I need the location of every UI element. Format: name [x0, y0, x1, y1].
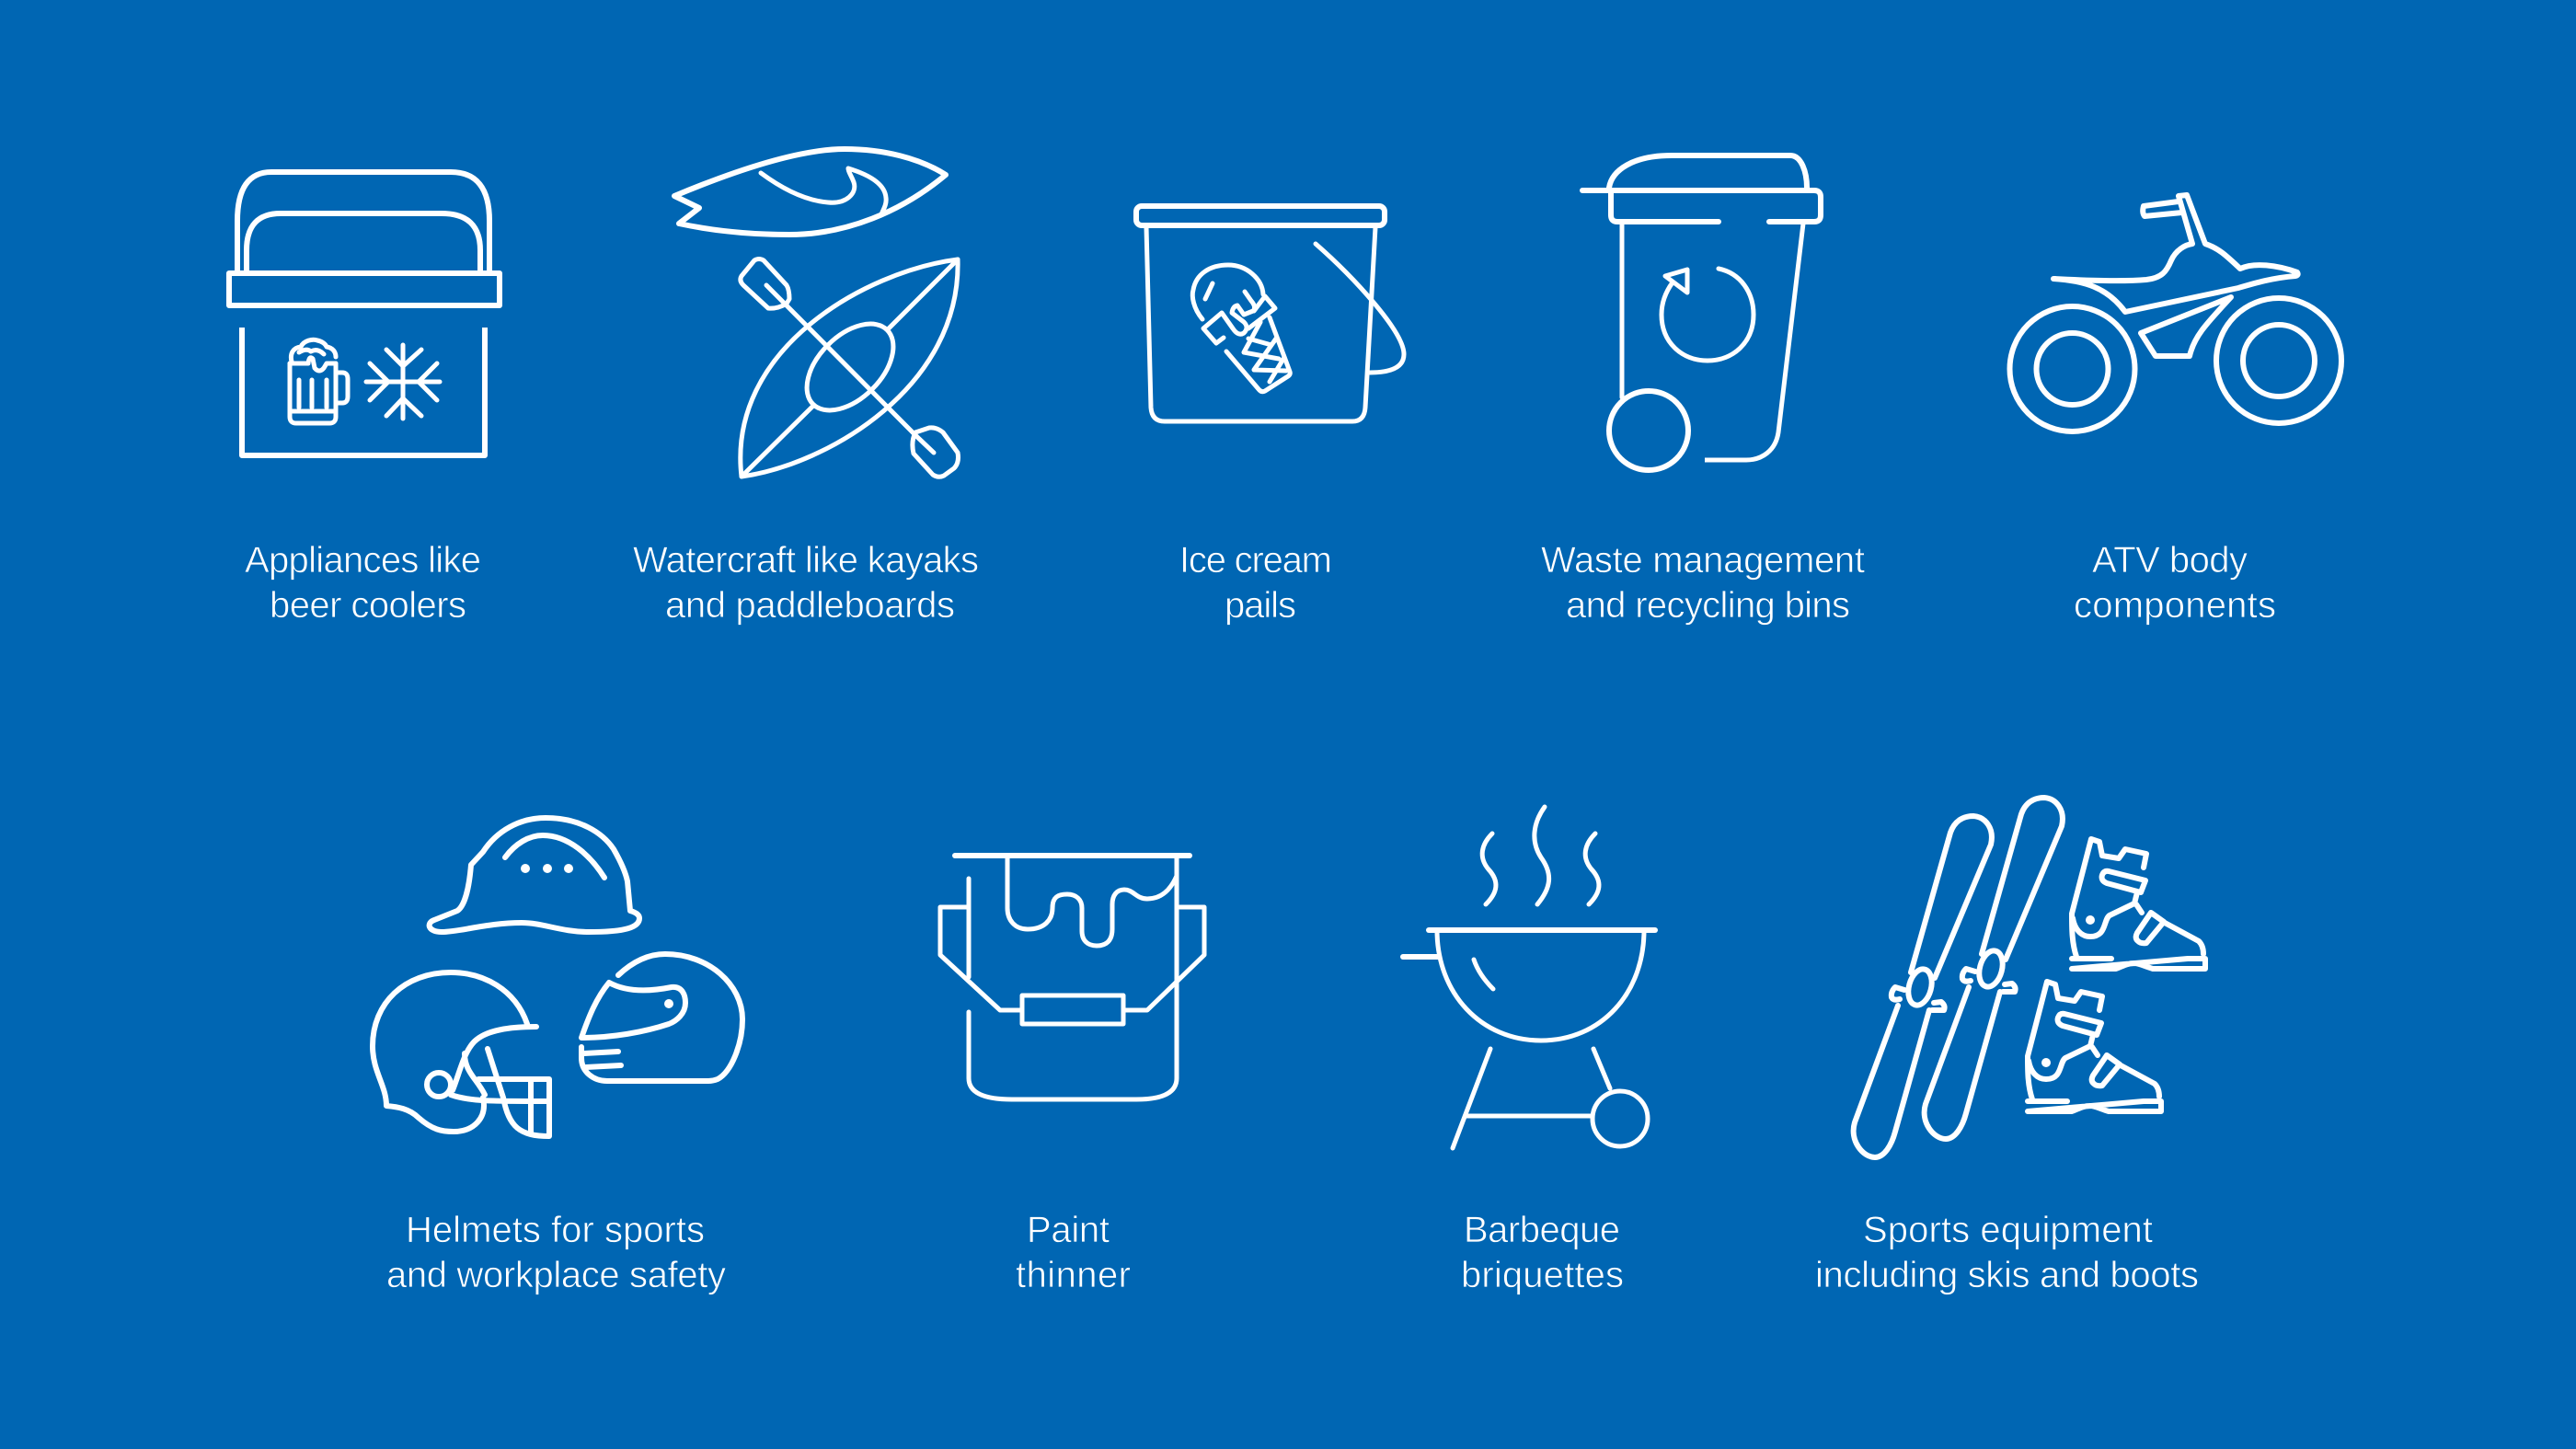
label: sports equipment: including skis and boots: [1815, 1255, 2199, 1295]
panel: appliances: [229, 172, 500, 626]
label: paint thinner: [1016, 1210, 1131, 1295]
panel: ATV: [2009, 195, 2341, 626]
label: ice cream pails: pails: [1225, 585, 1296, 626]
icon: pail with ice cream: [1136, 206, 1404, 421]
icon: paint can: [940, 856, 1204, 1099]
label: paint thinner: thinner: [1016, 1255, 1131, 1295]
label: barbeque: Barbeque: [1464, 1210, 1620, 1250]
panel: waste bins: [1541, 155, 1865, 626]
label: waste bins: [1541, 540, 1865, 626]
label: barbeque: [1461, 1210, 1624, 1295]
label: sports equipment: [1815, 1210, 2199, 1295]
label: watercraft: Watercraft like kayaks: [633, 540, 979, 581]
label: watercraft: [633, 540, 979, 626]
label: helmets: Helmets for sports: [406, 1210, 705, 1250]
panel: ice cream pails: [1136, 206, 1404, 626]
panel: barbeque: [1403, 807, 1655, 1295]
label: barbeque: briquettes: [1461, 1255, 1624, 1295]
label: paint thinner: Paint: [1027, 1210, 1110, 1250]
panel: sports equipment: [1815, 798, 2205, 1295]
icon: recycling bin: [1582, 155, 1821, 470]
label: appliances: beer coolers: [270, 585, 466, 626]
icon: helmets: [373, 818, 742, 1136]
label: sports equipment: Sports equipment: [1863, 1210, 2153, 1250]
label: ATV: ATV body: [2092, 540, 2248, 581]
label: helmets: and workplace safety: [386, 1255, 726, 1295]
label: waste bins: Waste management: [1541, 540, 1865, 581]
label: appliances: Appliances like: [245, 540, 481, 581]
label: helmets: [386, 1210, 726, 1295]
panel: helmets: [373, 818, 742, 1295]
icon: grill: [1403, 807, 1655, 1148]
icon: skis and boots: [1854, 798, 2205, 1157]
label: waste bins: and recycling bins: [1566, 585, 1850, 626]
panel: watercraft: [633, 149, 979, 626]
label: appliances: [245, 540, 481, 626]
label: watercraft: and paddleboards: [665, 585, 955, 626]
label: ice cream pails: [1179, 540, 1332, 626]
icon: cooler: [229, 172, 500, 455]
label: ATV: components: [2074, 585, 2276, 626]
icon: ATV: [2009, 195, 2341, 431]
label: ice cream pails: Ice cream: [1179, 540, 1332, 581]
label: ATV: [2074, 540, 2276, 626]
panel: paint thinner: [940, 856, 1204, 1295]
icon: surfboard and kayak: [674, 149, 959, 477]
